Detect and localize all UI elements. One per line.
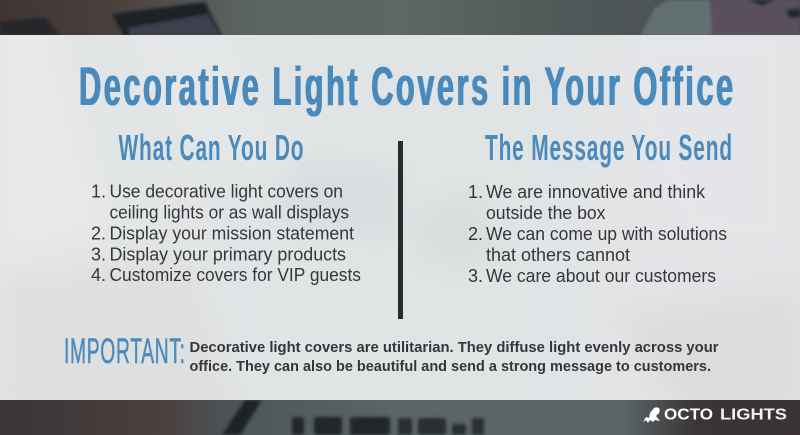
left numbered list: 3. (91, 244, 106, 264)
title: Decorative Light Covers in Your Office (79, 57, 733, 117)
left column: what can you do (91, 128, 361, 285)
left numbered list: Display your mission statement (110, 224, 354, 244)
right numbered list: 3. (468, 266, 483, 286)
left numbered list: Use decorative light covers on (110, 182, 343, 202)
left numbered list: ceiling lights or as wall displays (110, 202, 349, 222)
important text: office. They can also be beautiful and send a strong message to customers. (190, 358, 711, 375)
background photo: top band (0, 0, 800, 36)
important text (190, 339, 719, 375)
important label: IMPORTANT: (64, 331, 185, 370)
right numbered list: We are innovative and think (486, 182, 706, 202)
logo wordmark: octo: OCTO (664, 406, 713, 424)
left numbered list: 2. (91, 224, 106, 244)
left numbered list: Display your primary products (110, 244, 346, 264)
left heading: What Can You Do (118, 128, 304, 169)
vertical divider (398, 141, 403, 319)
important text: Decorative light covers are utilitarian. They diffuse light evenly across your (190, 339, 719, 356)
logo wordmark: lights: LIGHTS (720, 406, 787, 424)
right numbered list: 1. (468, 182, 483, 202)
left numbered list: 1. (91, 182, 106, 202)
left numbered list: Customize covers for VIP guests (110, 265, 361, 285)
right heading: The Message You Send (485, 128, 732, 169)
icon: octopus (643, 407, 660, 423)
right numbered list: 2. (468, 224, 483, 244)
right numbered list (468, 182, 727, 286)
right column: the message you send (468, 128, 732, 286)
right numbered list: outside the box (486, 203, 606, 223)
right numbered list: that others cannot (486, 245, 630, 265)
right numbered list: We care about our customers (486, 266, 716, 286)
left numbered list (91, 182, 361, 285)
logo: octo lights (643, 406, 787, 424)
important note (64, 331, 719, 375)
left numbered list: 4. (91, 265, 106, 285)
right numbered list: We can come up with solutions (486, 224, 727, 244)
background photo: bottom band (0, 400, 800, 435)
